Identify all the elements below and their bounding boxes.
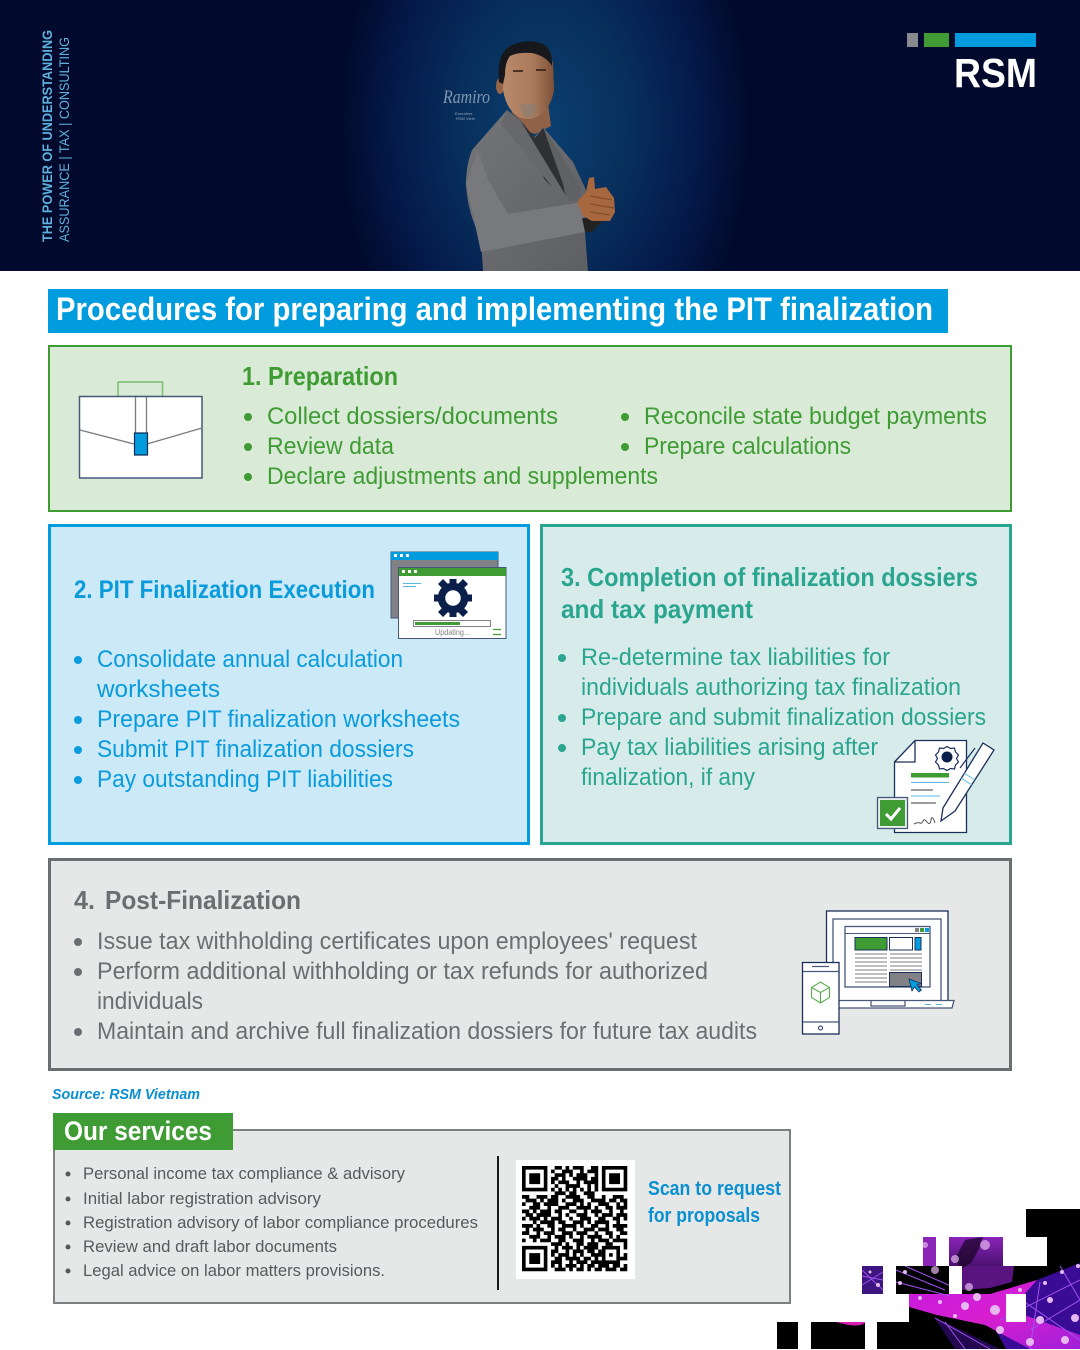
tab heading: Our services [64, 1116, 212, 1146]
tagline: rotated text [39, 30, 72, 242]
bullet list: Reconcile state budget payments [644, 403, 987, 430]
services list: Personal income tax compliance & advisory [83, 1164, 405, 1183]
services list: Legal advice on labor matters provisions. [83, 1261, 385, 1280]
heading: 3. Completion of finalization dossiers [561, 562, 978, 592]
icon: software update window: Updating... [435, 628, 470, 637]
icon: briefcase [80, 382, 202, 478]
bullet list: Prepare calculations [644, 433, 851, 460]
bullet list: Collect dossiers/documents [267, 403, 558, 430]
decorative pixel network image [777, 1209, 1080, 1350]
icon: software update window [391, 552, 506, 638]
bullet list: Consolidate annual calculation [97, 646, 403, 673]
panel: 3 completion [542, 526, 1010, 844]
scan to request label: Scan to request [648, 1178, 781, 1200]
signature [442, 87, 490, 121]
bullet list: Maintain and archive full finalization dossiers for future tax audits [97, 1018, 757, 1045]
bullet list: worksheets [96, 676, 220, 703]
heading: 4. [74, 885, 95, 915]
bullet list: Prepare PIT finalization worksheets [97, 706, 460, 733]
heading: 2. PIT Finalization Execution [74, 576, 375, 604]
icon: laptop and phone [802, 911, 954, 1034]
services list: Initial labor registration advisory [83, 1189, 321, 1208]
bullet list [558, 644, 986, 791]
signature: Executive [455, 111, 473, 116]
services list: Registration advisory of labor compliance procedures [83, 1213, 478, 1232]
bullet list: Prepare and submit finalization dossiers [581, 704, 986, 731]
bullet list: Declare adjustments and supplements [267, 463, 658, 490]
services list: Review and draft labor documents [83, 1237, 337, 1256]
portrait [466, 41, 615, 271]
title bar: Procedures for preparing and implementing the PIT finalization [56, 291, 933, 327]
bullet list: Submit PIT finalization dossiers [97, 736, 414, 763]
bullet list: Pay tax liabilities arising after [581, 734, 878, 761]
signature: Ramiro [442, 87, 490, 108]
icon: signed document [878, 740, 994, 832]
RSM logo: RSM [954, 50, 1037, 96]
bullet list [244, 403, 987, 490]
panel: 2 execution [50, 526, 528, 844]
scan to request label: for proposals [648, 1205, 760, 1227]
services list [66, 1164, 478, 1280]
scan to request label [648, 1178, 781, 1227]
source note: Source: RSM Vietnam [52, 1086, 200, 1103]
bullet list: Perform additional withholding or tax refunds for authorized [97, 958, 708, 985]
heading [561, 562, 978, 624]
heading: 1. Preparation [242, 361, 398, 391]
bullet list: Pay outstanding PIT liabilities [97, 766, 393, 793]
bullet list: Issue tax withholding certificates upon employees' request [97, 928, 697, 955]
header banner [0, 0, 1080, 271]
bullet list: individuals [97, 988, 203, 1015]
tagline: rotated text: THE POWER OF UNDERSTANDING [39, 30, 55, 242]
signature: RSM Vietn [456, 116, 475, 121]
bullet list [74, 928, 757, 1045]
tagline: rotated text: ASSURANCE | TAX | CONSULTING [56, 37, 72, 242]
bullet list: finalization, if any [581, 764, 755, 791]
RSM logo [907, 33, 1037, 96]
panel: 1 preparation [49, 346, 1011, 511]
bullet list: Review data [267, 433, 395, 460]
panel: our services [53, 1113, 790, 1303]
bullet list: Re-determine tax liabilities for [581, 644, 890, 671]
bullet list [74, 646, 460, 793]
heading: and tax payment [561, 594, 753, 624]
heading: Post-Finalization [105, 885, 301, 915]
panel: 4 post-finalization [50, 860, 1010, 1070]
QR code [516, 1160, 635, 1279]
bullet list: individuals authorizing tax finalization [581, 674, 961, 701]
